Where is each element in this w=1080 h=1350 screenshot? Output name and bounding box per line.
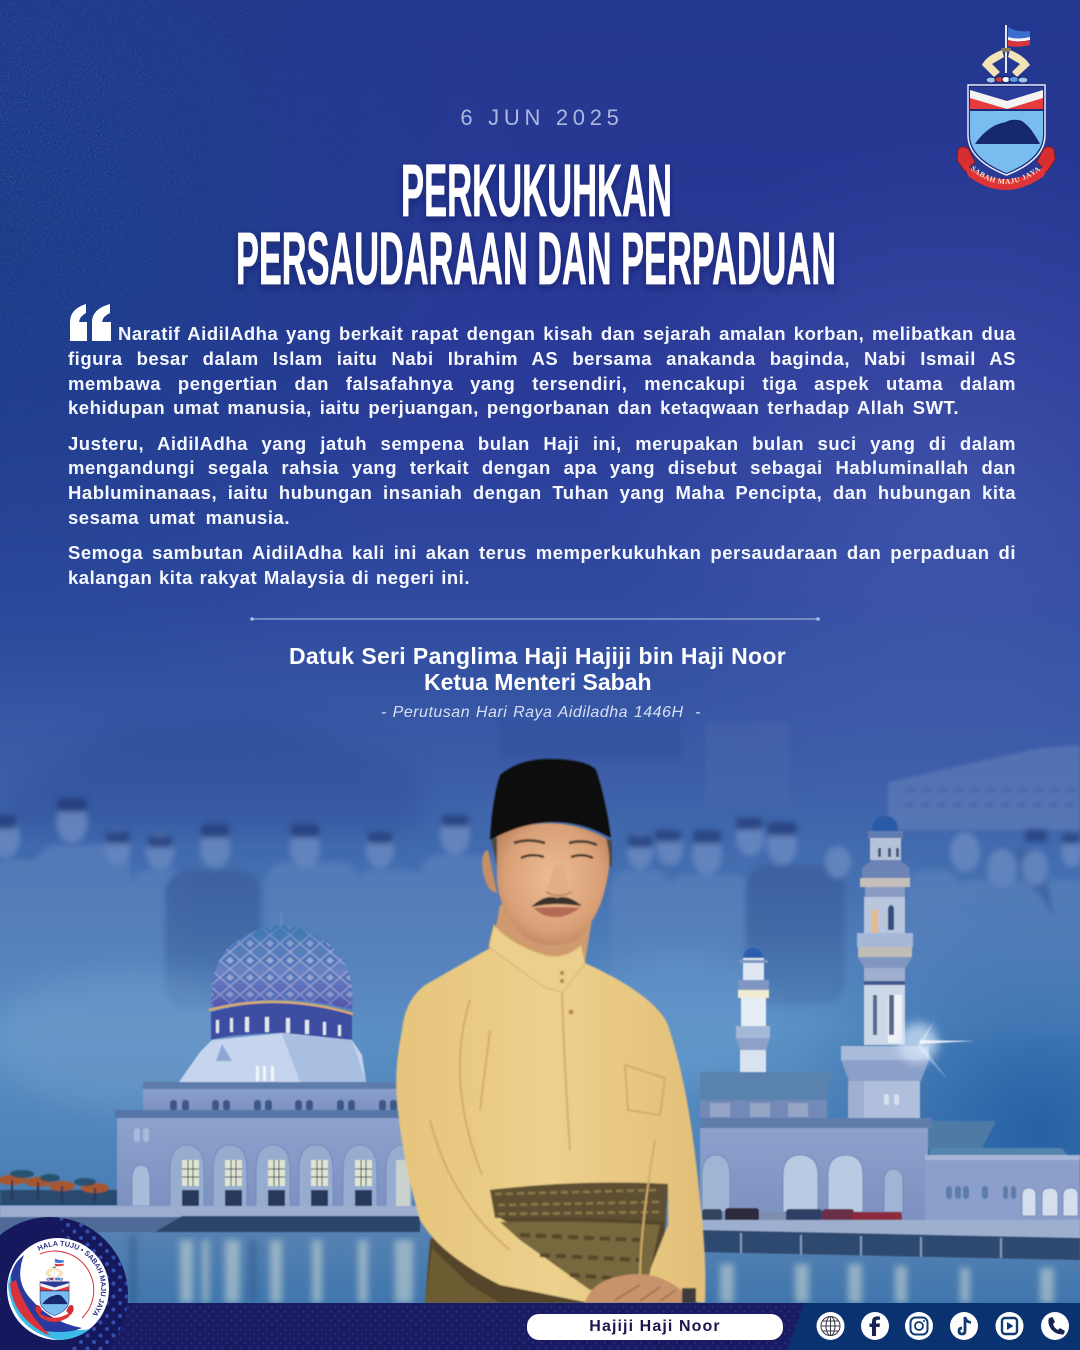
- social media icons: [816, 1312, 1069, 1340]
- distant mist: [0, 970, 270, 1110]
- social handle text: Hajiji Haji Noor: [589, 1318, 721, 1335]
- water with reflections: [0, 1205, 1080, 1305]
- message paragraph 1: [68, 323, 1016, 418]
- title: [235, 150, 837, 300]
- main wall: [700, 1118, 928, 1222]
- state crest: SABAH MAJU JAYA: [970, 166, 1040, 184]
- footer band right: [787, 1303, 1080, 1350]
- eyes: [521, 855, 593, 858]
- arched windows: [132, 1145, 412, 1207]
- signatory name: Datuk Seri Panglima Haji Hajiji bin Haji Noor: [289, 643, 786, 669]
- icon: phone: [1041, 1312, 1069, 1340]
- brows: [514, 840, 597, 845]
- message paragraph 2: sesama umat manusia.: [68, 507, 290, 528]
- ears: [482, 850, 497, 893]
- signatory position: Ketua Menteri Sabah: [424, 669, 652, 695]
- faded crowd photograph: [0, 796, 1080, 1005]
- floating mosque: right wing with minarets: [700, 816, 1080, 1260]
- message paragraph 2: Justeru, AidilAdha yang jatuh sempena bulan Haji ini, merupakan bulan suci yang di dalam: [68, 433, 1016, 454]
- portrait of Datuk Seri Hajiji: [396, 759, 705, 1303]
- signatory: [289, 643, 786, 695]
- message paragraph 3: Semoga sambutan AidilAdha kali ini akan terus memperkukuhkan persaudaraan dan perpaduan di: [68, 542, 1016, 563]
- neck: [492, 900, 595, 990]
- footer band left: [0, 1303, 806, 1350]
- message source: - Perutusan Hari Raya Aidiladha 1446H -: [381, 704, 701, 721]
- shirt folds: [430, 992, 665, 1280]
- faded city buildings: [500, 720, 1080, 830]
- floating mosque: main hall and dome: [0, 912, 420, 1232]
- white roof: [179, 1033, 366, 1082]
- message paragraph 1: kehidupan umat manusia, iaitu perjuangan, pengorbanan dan ketaqwaan terhadap Allah SWT.: [68, 397, 959, 418]
- message paragraph 2: Habluminanaas, iaitu hubungan insaniah dengan Tuhan yang Maha Pencipta, dan hubungan kita: [68, 482, 1016, 503]
- face: [497, 823, 609, 945]
- upper storey: [143, 1082, 403, 1112]
- message paragraph 1: figura besar dalam Islam iaitu Nabi Ibrahim AS bersama anakanda baginda, Nabi Ismail AS: [68, 348, 1016, 369]
- collar: [489, 925, 585, 992]
- icon: tiktok: [950, 1312, 978, 1340]
- icon: website: [816, 1312, 844, 1340]
- mouth: [534, 907, 580, 917]
- lower storey: [117, 1116, 407, 1208]
- big minaret: [841, 816, 929, 1123]
- hands: [585, 1274, 692, 1303]
- title: PERKUKUHKAN: [401, 150, 672, 232]
- nose: [546, 865, 572, 896]
- palm trees on the left shore: [0, 1170, 120, 1206]
- moustache: [531, 897, 582, 907]
- message paragraph 1: membawa pengertian dan falsafahnya yang tersendiri, mencakupi tiga aspek utama dalam: [68, 373, 1016, 394]
- sarong gold band: [490, 1182, 668, 1222]
- message paragraph 2: [68, 433, 1016, 528]
- icon: facebook: [861, 1312, 889, 1340]
- quote mark: [70, 304, 111, 341]
- terrace: [0, 1206, 420, 1217]
- parked cars: [702, 1208, 902, 1221]
- dome: [209, 912, 353, 1042]
- round logo badge: [0, 1217, 128, 1350]
- shirt: [396, 948, 705, 1303]
- roof structures: [700, 1072, 832, 1100]
- promenade: [700, 1220, 1080, 1238]
- hair: [491, 838, 612, 872]
- date: 6 JUN 2025: [460, 105, 624, 130]
- sarong behind: [425, 1182, 668, 1303]
- lens glare: [898, 1020, 975, 1080]
- message paragraph 3: [68, 542, 1016, 588]
- state crest: [956, 25, 1056, 190]
- message paragraph 3: kalangan kita rakyat Malaysia di negeri ini.: [68, 567, 470, 588]
- message paragraph 1: Naratif AidilAdha yang berkait rapat dengan kisah dan sejarah amalan korban, melibatkan dua: [118, 323, 1016, 344]
- icon: youtube: [996, 1312, 1024, 1340]
- songkok: [490, 759, 611, 840]
- small minaret: [736, 948, 770, 1074]
- divider: [250, 617, 820, 621]
- round logo badge: HALA TUJU • SABAH MAJU JAYA: [37, 1240, 106, 1316]
- message paragraph 2: mengandungi segala rahsia yang terkait dengan apa yang disebut sebagai Habluminallah dan: [68, 457, 1016, 478]
- social handle pill: [527, 1314, 783, 1340]
- icon: instagram: [905, 1312, 933, 1340]
